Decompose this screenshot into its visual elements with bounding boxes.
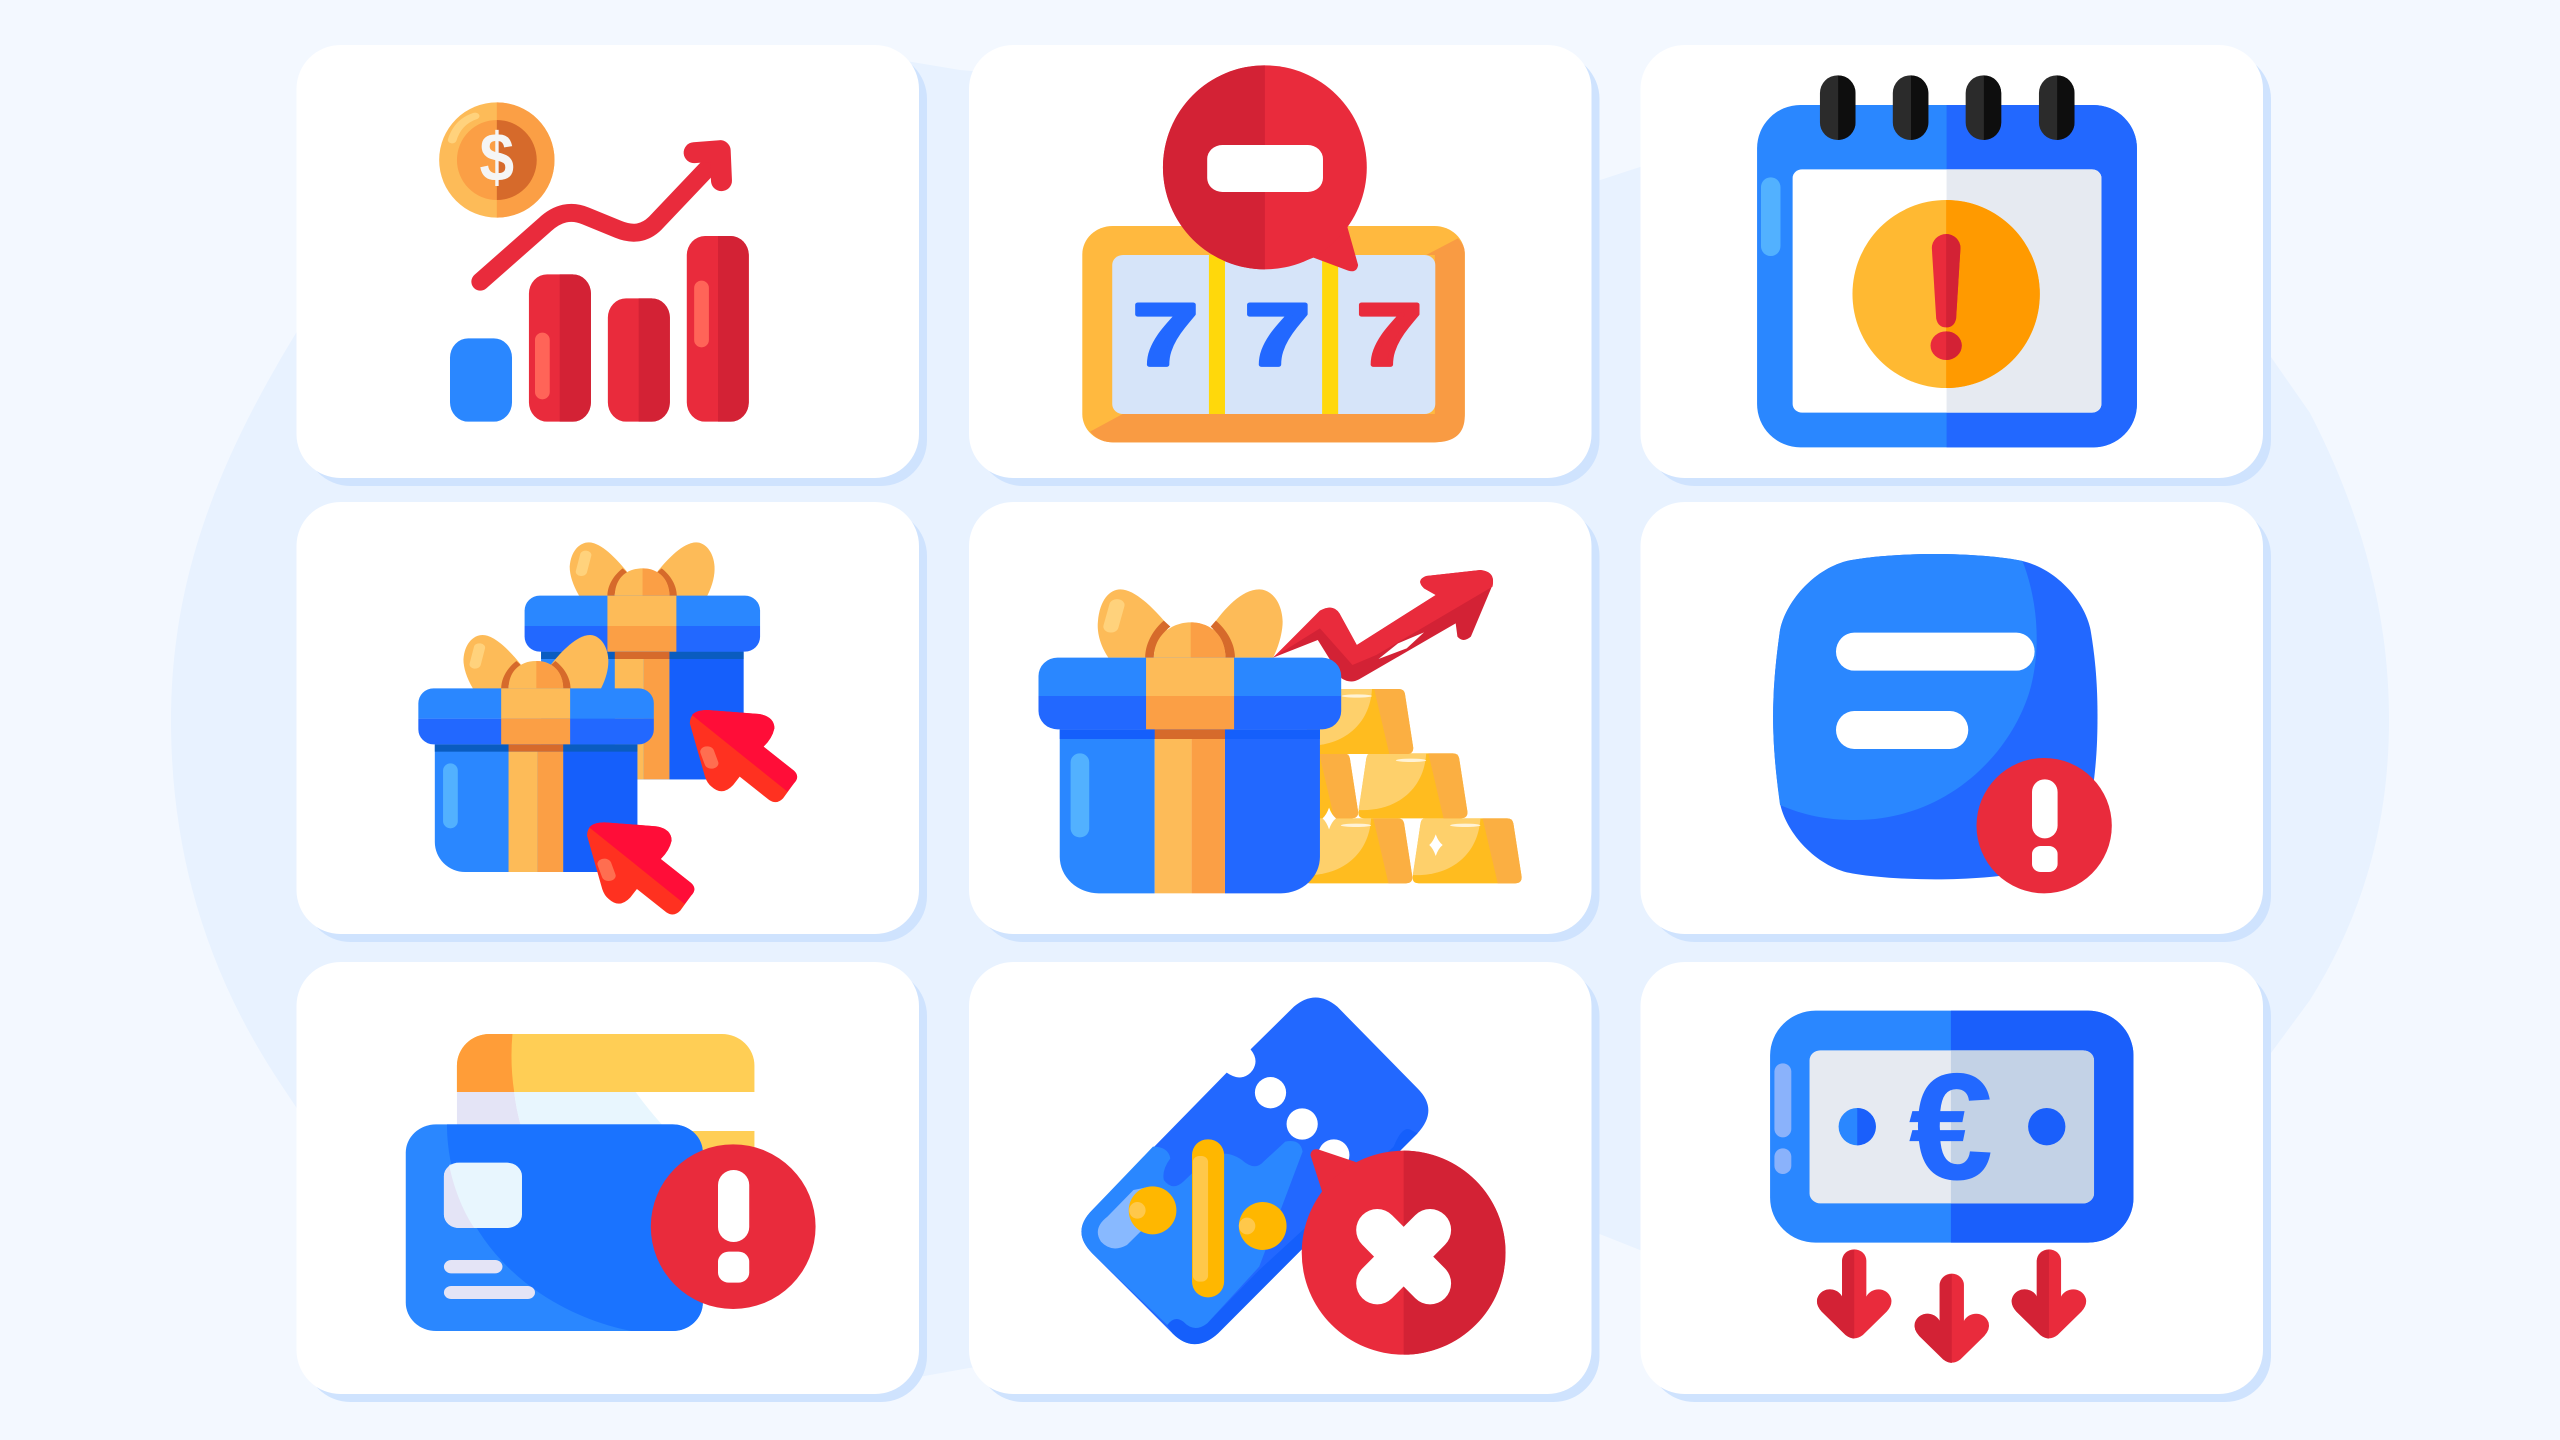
icon: squircle note with alert — [1773, 554, 2112, 893]
icon: calendar with exclamation — [1757, 75, 2137, 447]
icon: discount coupon — [1081, 997, 1428, 1344]
panel: gift with gold and arrow — [969, 502, 1600, 942]
panel: euro banknote dropping — [1640, 962, 2271, 1402]
icon: slot machine frame — [1082, 226, 1465, 442]
icon: gift, gold bars and rising arrow — [1038, 570, 1522, 893]
arrow: red rising arrow — [1273, 570, 1493, 681]
icon: blue squircle — [1773, 554, 2097, 879]
panel: slot machine — [969, 45, 1600, 486]
icon: front card — [406, 1124, 703, 1331]
background blob — [171, 60, 2389, 1380]
arrow: rising trend line — [480, 151, 721, 282]
icon: slot machine frame: 7 — [1133, 286, 1198, 383]
icon: slot machine frame: 7 — [1357, 286, 1422, 383]
icon: banknote: € — [1909, 1042, 1993, 1212]
arrow: right down arrow — [2012, 1249, 2086, 1339]
calendar binder rings — [1820, 75, 2075, 140]
icon: back cursor — [690, 710, 797, 802]
icon: back card — [457, 1034, 754, 1158]
icon: slot machine with minus bubble — [1082, 65, 1465, 442]
bar chart — [450, 236, 749, 422]
icon: euro note with down arrows — [1770, 1011, 2133, 1363]
icon: red alert circle — [1977, 758, 2112, 893]
arrow: middle down arrow — [1915, 1274, 1989, 1363]
calendar body — [1757, 105, 2137, 447]
panel: message warning — [1640, 502, 2271, 942]
panel: chart with coin — [296, 45, 927, 486]
icon: red alert circle — [651, 1144, 816, 1309]
panel: calendar warning — [1640, 45, 2271, 486]
icon: large gift — [1038, 589, 1341, 893]
icon: credit cards with alert — [406, 1034, 816, 1331]
icon: front cursor — [587, 822, 694, 914]
icon: dollar coin — [439, 102, 555, 218]
icon: dollar coin: $ — [480, 119, 514, 196]
panel: credit card warning — [296, 962, 927, 1402]
icon: front gift — [418, 635, 654, 872]
icon: slot machine frame: 7 — [1245, 286, 1310, 383]
icon: cross speech bubble — [1302, 1149, 1506, 1355]
panel: two gifts with cursors — [296, 502, 927, 942]
icon: orange warning circle — [1852, 200, 2040, 388]
icon: coupon with cross bubble — [1081, 997, 1506, 1355]
icon: back gift — [525, 542, 760, 779]
icon: gold bars — [1249, 689, 1522, 883]
icon: banknote — [1770, 1011, 2133, 1243]
icon: rising chart with coin — [439, 102, 749, 422]
icon: minus speech bubble — [1163, 65, 1367, 271]
icon: gifts and click cursors — [418, 542, 797, 914]
panel: voucher rejected — [969, 962, 1600, 1402]
arrow: left down arrow — [1817, 1249, 1891, 1339]
